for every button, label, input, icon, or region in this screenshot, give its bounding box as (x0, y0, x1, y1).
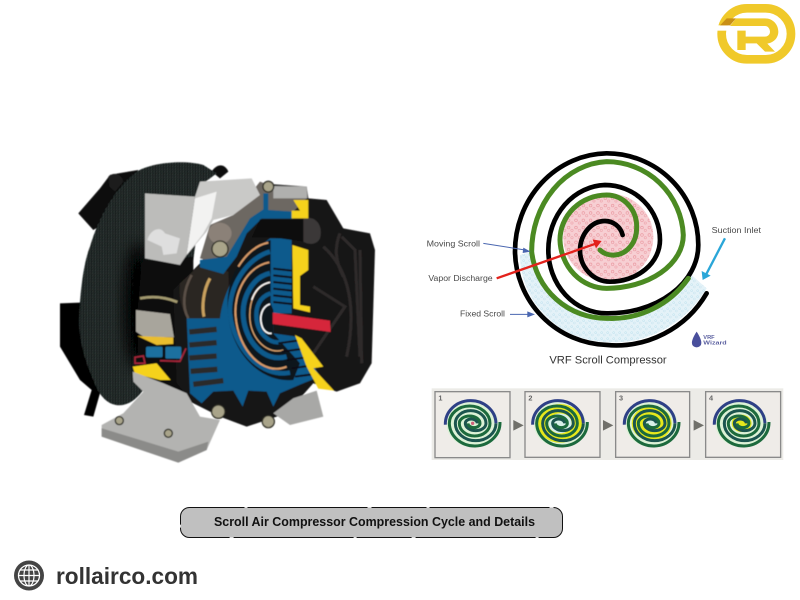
website text: rollairco.com (56, 563, 198, 589)
caption text: Scroll Air Compressor Compression Cycle and Details (214, 514, 535, 529)
rear black housing (60, 303, 100, 417)
bracket clamp (147, 229, 180, 255)
arrow 1 (513, 420, 524, 431)
rear top bracket (78, 170, 138, 230)
inner blue wrap (256, 293, 282, 342)
silver foot (102, 372, 220, 463)
step 2 (525, 392, 600, 457)
motor windings (140, 297, 177, 302)
step 1 (435, 392, 510, 458)
step 1: 1 (438, 394, 442, 403)
knob (208, 223, 232, 244)
yellow gasket lower (295, 335, 334, 391)
lower yellow plate (133, 363, 171, 380)
label: fixed scroll: Fixed Scroll (460, 309, 505, 318)
suction inlet arrow (702, 238, 725, 280)
moving scroll (532, 162, 688, 318)
label: suction inlet: Suction Inlet (712, 226, 762, 235)
shroud shadow (124, 243, 152, 370)
inner orange arc (250, 282, 283, 351)
blue bearing right (165, 347, 181, 359)
scroll compressor diagram (427, 153, 762, 367)
logo letter R (730, 18, 778, 52)
white center arc (261, 304, 272, 333)
block yellow edge (137, 336, 173, 345)
top right silver block (273, 186, 307, 198)
step 4 (706, 392, 781, 457)
moving scroll pointer (483, 243, 531, 253)
yellow gasket middle (292, 245, 310, 312)
rotor dark ring (184, 275, 192, 318)
intake tunnel (252, 219, 303, 242)
scroll cavity (227, 240, 300, 380)
right foot (273, 391, 323, 425)
housing ribs (313, 233, 362, 363)
blue casting (187, 238, 320, 407)
label: vapor discharge: Vapor Discharge (428, 274, 493, 283)
logo: yellow R emblem (715, 8, 791, 59)
bolts (115, 181, 274, 437)
four-step compression strip (432, 388, 783, 460)
logo dark accent (720, 18, 736, 25)
icon: globe (14, 560, 44, 590)
fixed scroll pointer (510, 311, 535, 317)
logo ring (722, 8, 791, 59)
caption bar (180, 508, 562, 538)
step 3: 3 (619, 394, 623, 403)
right black housing (173, 183, 375, 427)
yellow gasket top (292, 200, 308, 218)
bracket highlight (187, 192, 217, 255)
intake cylinder (303, 218, 321, 244)
white arc top (252, 282, 270, 300)
logo white band (715, 25, 732, 31)
step 2: 2 (528, 394, 532, 403)
suction region (520, 252, 707, 342)
discharge region (563, 193, 653, 282)
red shaft (273, 313, 331, 332)
left silver block (136, 310, 174, 337)
blue upper flange (200, 193, 293, 274)
diagram caption: VRF Scroll Compressor (549, 355, 667, 367)
caption background (180, 508, 562, 538)
outer blue wrap (230, 252, 290, 373)
label: moving scroll: Moving Scroll (427, 239, 480, 248)
mount ear right (212, 165, 228, 178)
mount ear left (108, 174, 123, 192)
VRF Wizard name: Wizard (703, 340, 727, 346)
upper silver bracket right panel (187, 178, 260, 255)
footer website (14, 560, 198, 590)
icon: VRF Wizard drop (692, 332, 701, 347)
blue bearing left (146, 347, 163, 357)
red seal (135, 348, 186, 363)
top orange seal (238, 243, 268, 267)
speckled fan shroud (79, 162, 217, 405)
black central cavity (137, 257, 193, 403)
rotor disc (180, 265, 230, 320)
strip background (432, 388, 783, 460)
compressor cutaway photo (60, 162, 375, 463)
foot shading (102, 428, 208, 463)
middle blue wrap (243, 273, 287, 358)
upper silver bracket left panel (145, 193, 195, 265)
bearing parts (135, 347, 186, 363)
main orange arc (235, 262, 287, 369)
grey upper casting (200, 182, 307, 265)
VRF Wizard mark: VRF (703, 335, 715, 341)
rotor ring (203, 278, 210, 317)
arrow 2 (603, 420, 613, 431)
vapor discharge arrow (497, 239, 602, 278)
left cooling fins (189, 329, 223, 384)
right cooling fins (273, 269, 315, 377)
step 3 (616, 392, 690, 457)
scroll arcs (230, 243, 290, 373)
step 4: 4 (709, 394, 714, 403)
fixed scroll (515, 153, 707, 345)
arrow 3 (694, 420, 704, 431)
